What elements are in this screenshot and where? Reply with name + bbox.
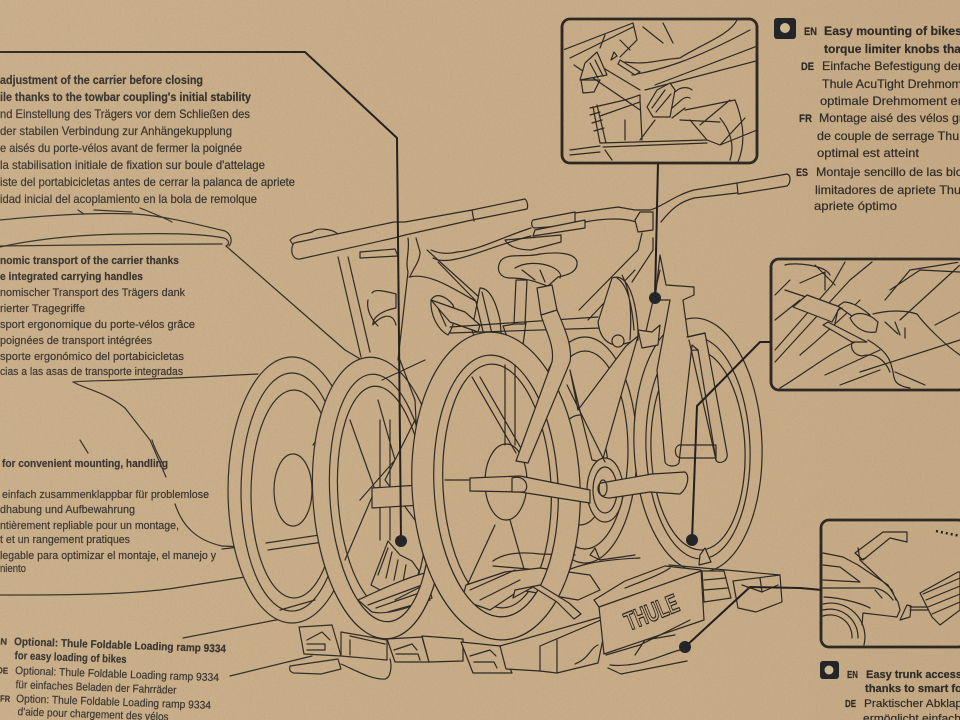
inset: trunk access detail (821, 520, 960, 647)
text block: optional loading ramp: Option: Thule Foldable Loading ramp 9334 (16, 693, 211, 712)
text block: carrier adjustment: der stabilen Verbindung zur Anhängekupplung (0, 124, 232, 138)
text block: foldable carrier: einfach zusammenklappbar für problemlose (2, 489, 209, 501)
text block: foldable carrier: dhabung und Aufbewahrung (0, 504, 135, 516)
tyres passing in front of the rack rails (318, 545, 576, 640)
front wheel (404, 328, 588, 644)
text block: ergonomic transport: sporte ergonómico del portabicicletas (0, 351, 184, 363)
text block: easy mounting with torque limiter knobs: torque limiter knobs tha (824, 42, 960, 56)
text block: easy mounting with torque limiter knobs: optimal est atteint (817, 146, 920, 160)
text block: foldable carrier: legable para optimizar el montaje, el manejo y (0, 550, 216, 562)
fork and head tube (644, 255, 727, 466)
rear bike handlebar and stem (290, 199, 561, 360)
text block: optional loading ramp (0, 635, 227, 720)
text block: easy mounting with torque limiter knobs: EN (804, 26, 817, 38)
text block: easy mounting with torque limiter knobs: ES (796, 167, 808, 179)
text block: easy trunk access: DE (845, 699, 856, 710)
text block: ergonomic transport: rierter Tragegriffe (0, 303, 85, 315)
clamp arms on rack frame (431, 275, 660, 348)
text block: easy trunk access: EN (847, 670, 858, 681)
leader lines and callout dots (0, 52, 822, 653)
wheel 1 (228, 357, 420, 623)
right wheel (630, 316, 766, 574)
text block: easy mounting with torque limiter knobs: apriete óptimo (814, 199, 897, 213)
text block: carrier adjustment: e aisés du porte-vélos avant de fermer la poignée (0, 141, 242, 155)
text block: optional loading ramp: for easy loading of bikes (14, 650, 127, 666)
text block: carrier adjustment: ile thanks to the towbar coupling's initial stability (0, 90, 251, 104)
text block: optional loading ramp: FR (0, 694, 11, 704)
car outline line art (0, 208, 362, 676)
inset: carrying handle detail (771, 259, 960, 390)
text block: ergonomic transport: cias a las asas de transporte integradas (0, 366, 183, 378)
text block: carrier adjustment (0, 73, 295, 206)
text block: foldable carrier: ntièrement repliable pour un montage, (0, 520, 179, 532)
carrier feet, bars, bumper and box (290, 548, 782, 679)
text block: ergonomic transport: nomischer Transport des Trägers dank (0, 287, 185, 299)
text block: easy trunk access (820, 661, 960, 720)
text block: foldable carrier (0, 458, 216, 575)
text block: ergonomic transport: nomic transport of the carrier thanks (0, 255, 179, 267)
text block: easy mounting with torque limiter knobs: Montaje sencillo de las bic (816, 165, 960, 179)
inset: knob detail (562, 19, 760, 163)
text block: easy mounting with torque limiter knobs (774, 18, 960, 213)
text block: easy trunk access: Easy trunk access (866, 669, 960, 681)
bike carrier rack (289, 540, 783, 680)
text block: ergonomic transport: sport ergonomique du porte-vélos grâce (0, 319, 195, 331)
text block: easy mounting with torque limiter knobs: DE (801, 61, 814, 73)
second bike handlebar and grips (532, 174, 790, 320)
icon: numbered marker (820, 661, 839, 679)
text block: foldable carrier: t et un rangement pratiques (0, 534, 130, 546)
text block: easy mounting with torque limiter knobs: Montage aisé des vélos gr (819, 111, 960, 125)
text block: easy mounting with torque limiter knobs: optimale Drehmoment er (820, 94, 960, 108)
text block: carrier adjustment: adjustment of the carrier before closing (0, 73, 203, 87)
text block: easy mounting with torque limiter knobs: Einfache Befestigung der (822, 59, 960, 73)
text block: optional loading ramp: Optional: Thule Foldable Loading ramp 9334 (14, 636, 227, 655)
text block: easy mounting with torque limiter knobs: Easy mounting of bikes (824, 24, 960, 38)
text block: ergonomic transport (0, 255, 195, 378)
text block: easy mounting with torque limiter knobs: FR (799, 113, 812, 125)
carrier strap over front tyre (513, 585, 581, 619)
Thule logo: THULE (620, 588, 683, 637)
text block: foldable carrier: for convenient mounting, handling (2, 458, 168, 470)
text block: optional loading ramp: Optional: Thule Foldable Loading ramp 9334 (15, 665, 219, 684)
text block: optional loading ramp: für einfaches Beladen der Fahrräder (15, 679, 177, 697)
text block: easy mounting with torque limiter knobs: de couple de serrage Thul (817, 129, 960, 143)
bikes illustration (228, 174, 790, 679)
wheel 2 (303, 353, 453, 643)
text block: carrier adjustment: iste del portabicicletas antes de cerrar la palanca de apriete (0, 175, 295, 189)
text block: foldable carrier: niento (0, 563, 26, 575)
text block: ergonomic transport: poignées de transport intégrées (0, 335, 152, 347)
text block: carrier adjustment: idad inicial del acoplamiento en la bola de remolque (0, 192, 257, 206)
text block: carrier adjustment: nd Einstellung des Trägers vor dem Schließen des (0, 107, 250, 121)
front bike frame, saddle and crank (470, 253, 688, 522)
wheel ratchet straps and rails seen through the wheels (358, 541, 640, 613)
rear centre wheel (533, 337, 637, 563)
text block: easy mounting with torque limiter knobs: limitadores de apriete Thu (815, 183, 960, 197)
text block: ergonomic transport: e integrated carrying handles (0, 271, 143, 283)
text block: easy trunk access: Praktischer Abklap (864, 698, 960, 710)
text block: easy trunk access: thanks to smart fo (865, 683, 960, 695)
icon: numbered marker (774, 18, 796, 39)
text block: carrier adjustment: la stabilisation initiale de fixation sur boule d'attelage (0, 158, 265, 172)
text block: easy mounting with torque limiter knobs: Thule AcuTight Drehmom (822, 77, 960, 91)
